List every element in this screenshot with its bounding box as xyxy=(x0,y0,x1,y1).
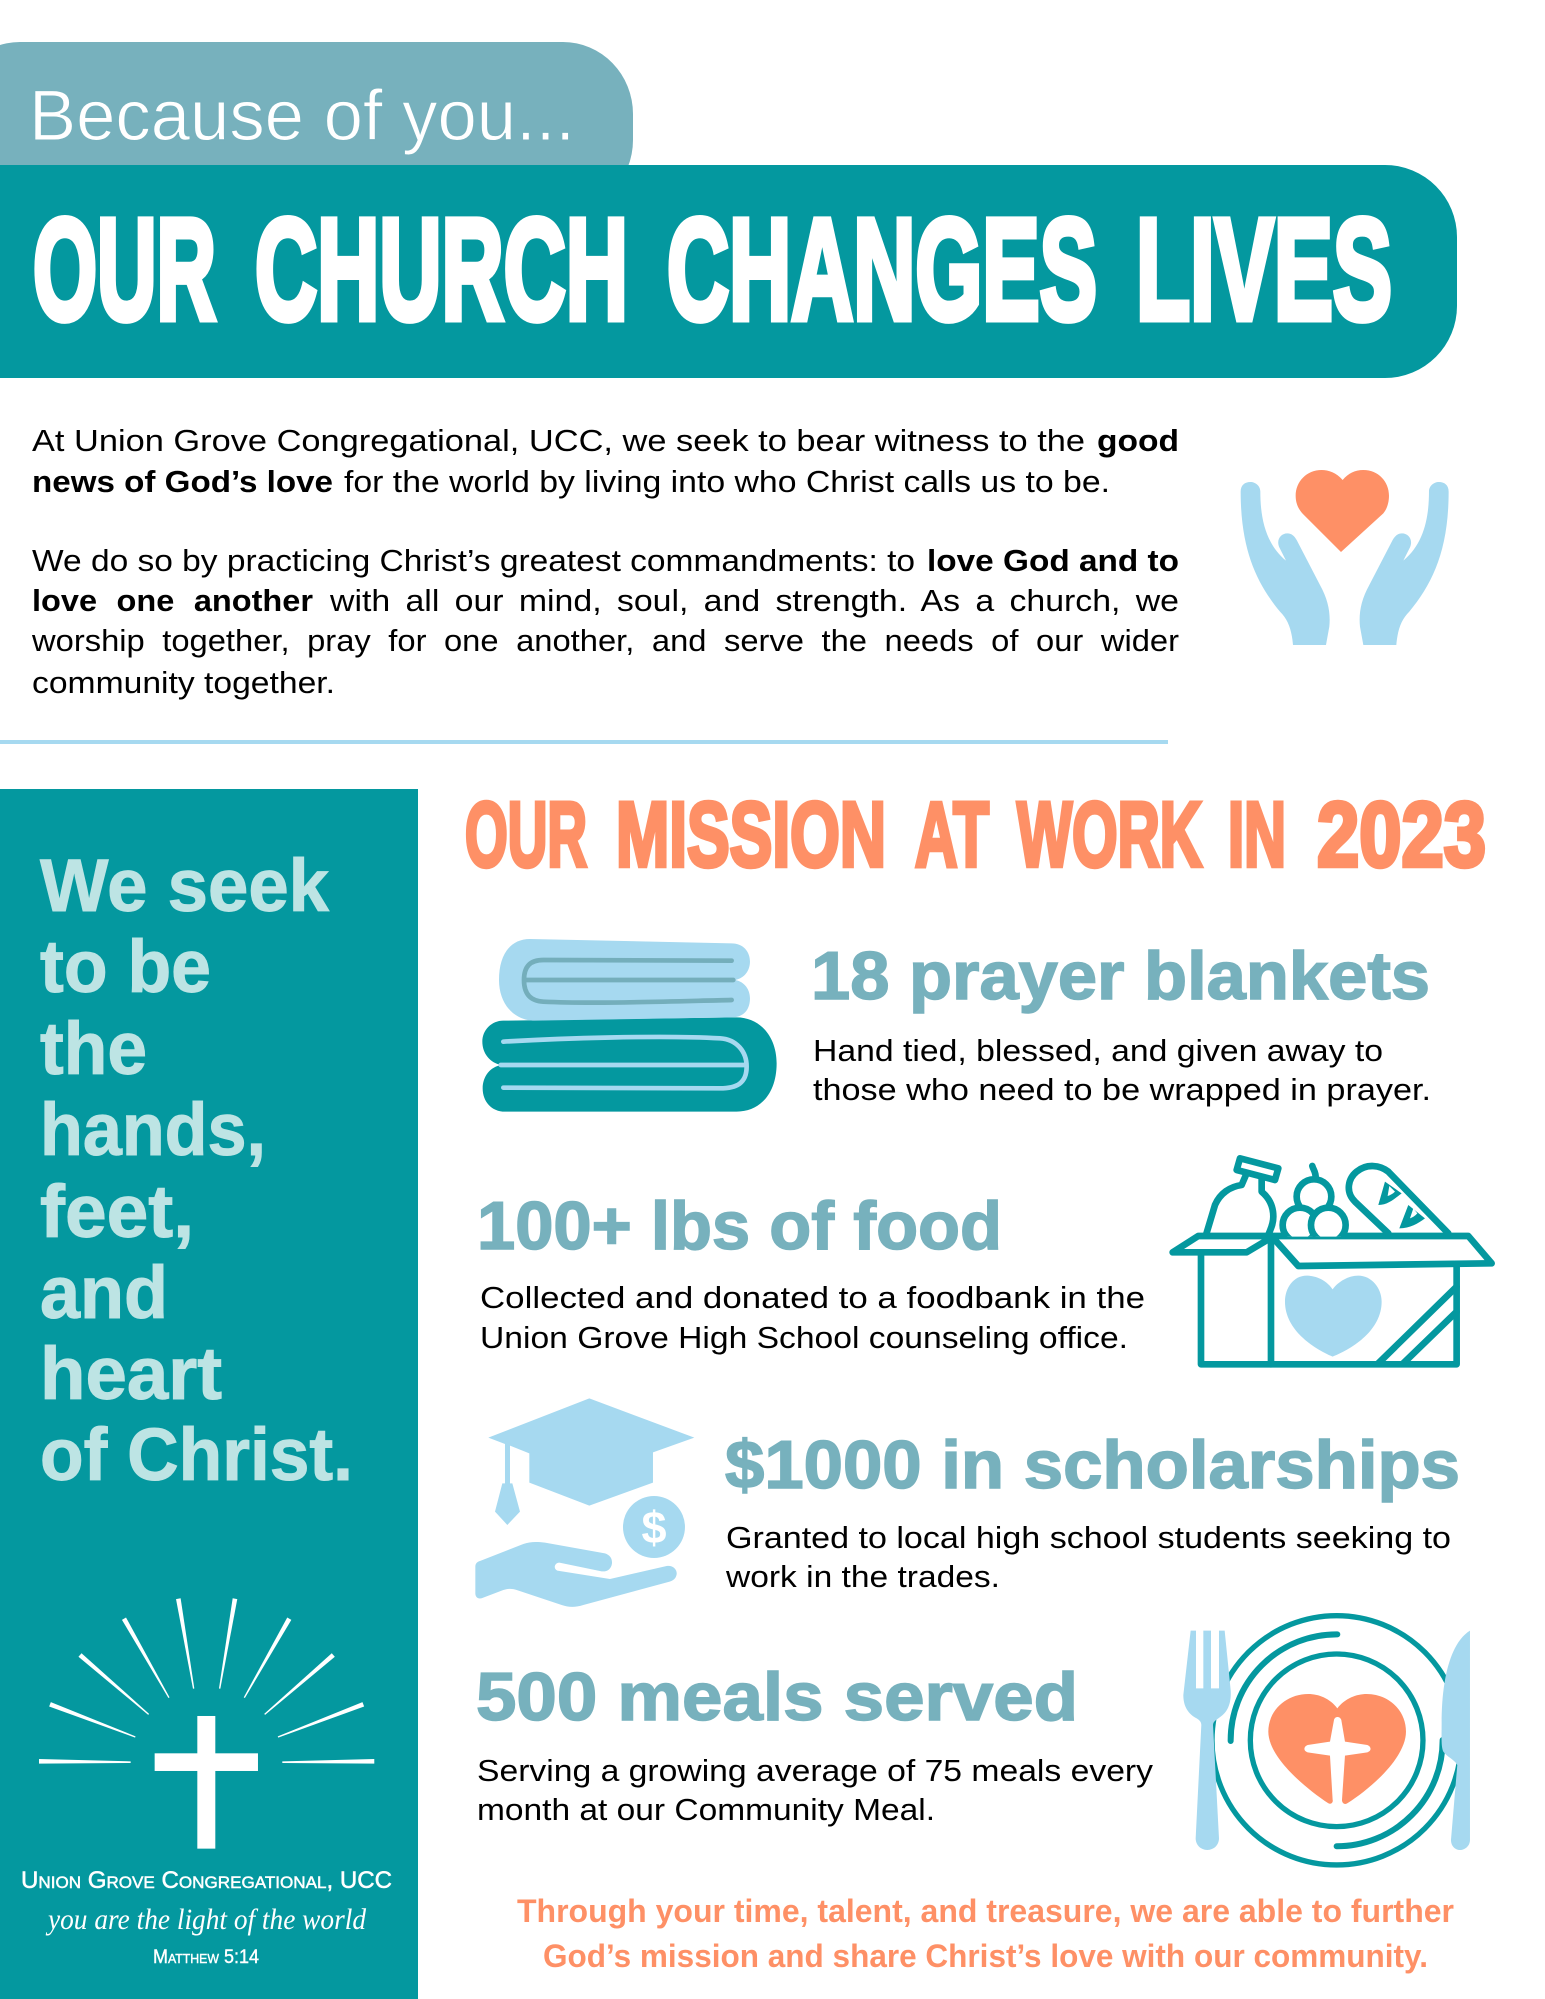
icon: food box xyxy=(1173,1158,1492,1364)
title banner xyxy=(0,165,1457,378)
stat: scholarships: work in the trades. xyxy=(725,1559,1000,1594)
stat: meals: 500 meals served xyxy=(476,1659,1078,1735)
stat: meals: month at our Community Meal. xyxy=(477,1792,935,1827)
heading: our mission at work: IN xyxy=(1228,784,1286,886)
intro text block: We do so by practicing Christ’s greatest commandments: to xyxy=(32,543,915,578)
sidebar statement: hands, xyxy=(40,1088,266,1171)
church name: Union Grove Congregational, UCC xyxy=(21,1867,392,1894)
stat: prayer blankets: Hand tied, blessed, and given away to xyxy=(813,1033,1383,1068)
title banner: LIVES xyxy=(1136,189,1392,350)
tagline: you are the light of the world xyxy=(45,1903,367,1936)
sidebar statement: of Christ. xyxy=(40,1413,353,1496)
intro text block: love God and to xyxy=(927,543,1179,578)
panel: left sidebar xyxy=(0,789,418,1999)
icon: hands holding heart xyxy=(1241,470,1449,645)
closing message: God’s mission and share Christ’s love with our community. xyxy=(543,1938,1428,1974)
sidebar statement: feet, xyxy=(40,1170,194,1253)
heading: our mission at work xyxy=(465,784,1486,886)
heading: our mission at work: 2023 xyxy=(1317,784,1486,886)
scripture reference: Matthew 5:14 xyxy=(153,1947,259,1968)
stat: scholarships xyxy=(725,1427,1460,1594)
stat: food xyxy=(477,1188,1145,1355)
closing message xyxy=(517,1893,1454,1974)
intro text block: worship together, pray for one another, and serve the needs of our wider xyxy=(31,623,1179,658)
stat: food: Union Grove High School counseling office. xyxy=(480,1320,1128,1355)
heading: our mission at work: AT xyxy=(915,784,989,886)
stat: food: 100+ lbs of food xyxy=(477,1188,1002,1264)
icon: graduation cap and coin in hand: $ xyxy=(641,1502,666,1553)
intro text block: for the world by living into who Christ calls us to be. xyxy=(344,464,1110,499)
sidebar statement xyxy=(40,844,353,1496)
icon: folded blankets xyxy=(482,939,777,1112)
intro text block: good xyxy=(1097,423,1179,458)
heading: our mission at work: WORK xyxy=(1017,784,1202,886)
sidebar statement: heart xyxy=(40,1332,222,1415)
heading: our mission at work: OUR xyxy=(465,784,587,886)
heading: our mission at work: MISSION xyxy=(616,784,886,886)
stat: prayer blankets: those who need to be wrapped in prayer. xyxy=(813,1072,1431,1107)
tab: because of you xyxy=(0,42,633,212)
intro text block: love one another xyxy=(32,583,313,618)
title banner: OUR xyxy=(33,189,216,350)
stat: meals xyxy=(476,1659,1154,1827)
title banner: CHURCH xyxy=(255,189,628,350)
stat: prayer blankets: 18 prayer blankets xyxy=(811,938,1430,1014)
sidebar statement: and xyxy=(40,1251,168,1334)
stat: meals: Serving a growing average of 75 meals every xyxy=(477,1753,1154,1788)
intro text block: with all our mind, soul, and strength. As a church, we xyxy=(329,583,1179,618)
sidebar statement: We seek xyxy=(40,844,330,927)
closing message: Through your time, talent, and treasure, we are able to further xyxy=(517,1893,1454,1929)
stat: scholarships: $1000 in scholarships xyxy=(725,1427,1460,1503)
stat: food: Collected and donated to a foodbank in the xyxy=(480,1280,1145,1315)
icon: cross with rays xyxy=(39,1598,374,1849)
title banner: CHANGES xyxy=(667,189,1097,350)
intro text block: At Union Grove Congregational, UCC, we seek to bear witness to the xyxy=(32,423,1085,458)
intro text block: community together. xyxy=(32,665,335,700)
stat: prayer blankets xyxy=(811,938,1431,1107)
tab: because of you: Because of you... xyxy=(29,77,575,156)
icon: graduation cap and coin in hand xyxy=(475,1398,694,1607)
intro text block: news of God’s love xyxy=(32,464,333,499)
icon: plate with heart and cross xyxy=(1183,1616,1470,1865)
stat: scholarships: Granted to local high school students seeking to xyxy=(726,1520,1451,1555)
sidebar statement: the xyxy=(40,1007,147,1090)
intro text block xyxy=(31,423,1179,700)
sidebar statement: to be xyxy=(40,925,211,1008)
